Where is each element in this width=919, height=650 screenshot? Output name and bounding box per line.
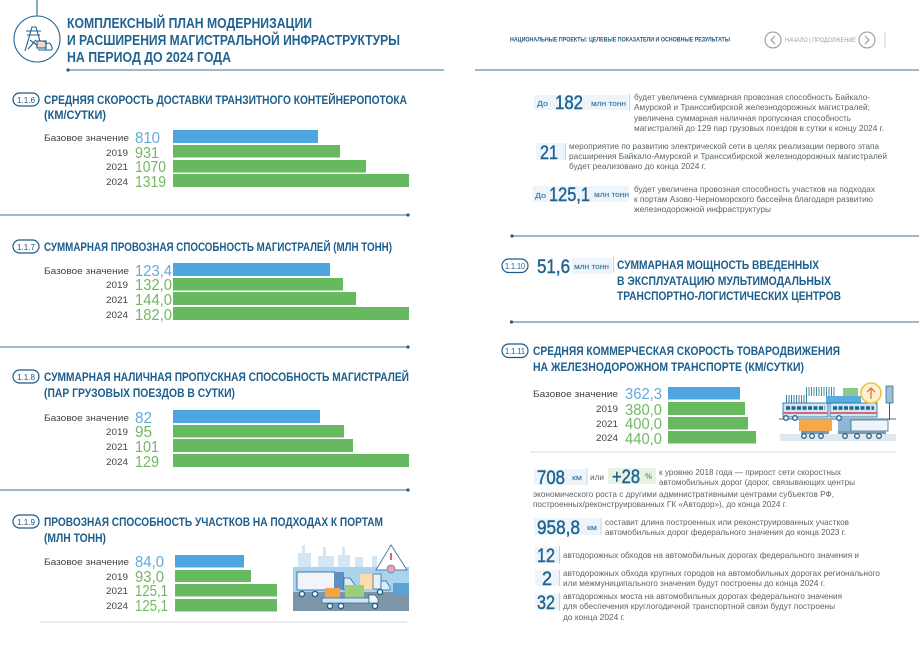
bar chart 1.1.6: 1319 (135, 174, 166, 191)
callout: 182 million tons: будет увеличена суммарная провозная способность Байкало- (634, 92, 870, 102)
bar chart 1.1.7: 2019 (106, 280, 128, 291)
badge 1.1.10 (502, 259, 528, 272)
title (67, 14, 400, 66)
callout: 182 million tons: До (537, 99, 548, 108)
heading 1.1.9 (44, 517, 383, 545)
callout: 708 km, +28 %: % (645, 472, 652, 481)
bar chart 1.1.9: 2024 (106, 601, 128, 612)
callout: 12 bypasses (535, 546, 859, 567)
bar chart 1.1.7: 123,4 (135, 263, 172, 280)
heading 1.1.10: ТРАНСПОРТНО-ЛОГИСТИЧЕСКИХ ЦЕНТРОВ (617, 291, 841, 303)
panel: 1.1.10 (502, 257, 841, 303)
bar chart 1.1.6: 2024 (106, 177, 128, 188)
heading 1.1.10: В ЭКСПЛУАТАЦИЮ МУЛЬТИМОДАЛЬНЫХ (617, 276, 831, 288)
callout: 182 million tons: 182 (555, 93, 583, 114)
heading 1.1.11: СРЕДНЯЯ КОММЕРЧЕСКАЯ СКОРОСТЬ ТОВАРОДВИЖЕНИЯ (533, 346, 840, 358)
callout: 32 bridges: автодорожных моста на автомобильных дорогах федерального значения (563, 591, 842, 601)
callout: 12 bypasses: автодорожных обходов на автомобильных дорогах федерального значения и (563, 550, 859, 560)
illustration: trains with speed-up sign and signal (779, 383, 896, 441)
panel: 1.1.7 (13, 240, 409, 324)
bar chart 1.1.9: 84,0 (135, 554, 164, 571)
badge 1.1.6 (13, 93, 39, 106)
badge 1.1.7 (13, 240, 39, 253)
bar chart 1.1.9: 125,1 (135, 583, 168, 600)
bar chart 1.1.9: Базовое значение (44, 557, 129, 568)
callout: 2 city bypasses (535, 568, 880, 590)
callout: 182 million tons: млн тонн (591, 99, 626, 108)
bar chart 1.1.8: 2024 (106, 457, 128, 468)
bar chart 1.1.11: 2024 (596, 433, 618, 444)
callout: 708 km, +28 %: автомобильных дорог (дорог, связывающих центры (659, 477, 855, 487)
bar chart 1.1.9: 93,0 (135, 569, 164, 586)
bar chart 1.1.6: 1070 (135, 159, 166, 176)
title rule (66, 68, 444, 72)
callout: 125.1 million tons: До (535, 191, 546, 200)
bar chart 1.1.9 (44, 554, 277, 615)
callout: 21 events: расширения Байкало-Амурской и Транссибирской железнодорожных магистралей (569, 151, 887, 161)
title: КОМПЛЕКСНЫЙ ПЛАН МОДЕРНИЗАЦИИ (67, 14, 312, 32)
callout: 125.1 million tons: 125,1 (549, 185, 590, 206)
bar chart 1.1.8: 82 (135, 410, 152, 427)
bar chart 1.1.11: 362,3 (625, 386, 662, 403)
callout: 958.8 km: составит длина построенных или реконструированных участков (605, 517, 849, 527)
badge 1.1.8: 1.1.8 (17, 372, 35, 382)
callout: 21 events (536, 141, 887, 171)
running header: НАЦИОНАЛЬНЫЕ ПРОЕКТЫ: ЦЕЛЕВЫЕ ПОКАЗАТЕЛИ И ОСНОВНЫЕ РЕЗУЛЬТАТЫ (510, 36, 730, 44)
heading 1.1.10: СУММАРНАЯ МОЩНОСТЬ ВВЕДЕННЫХ (617, 260, 819, 272)
callout: 182 million tons: магистралей до 129 пар грузовых поездов в сутки к концу 2024 г. (634, 123, 884, 133)
callout: 708 km, +28 %: +28 (612, 467, 640, 488)
bar chart 1.1.6: 810 (135, 130, 160, 147)
callout: 2 city bypasses: автодорожных обхода крупных городов на автомобильных дорогах регионального (563, 568, 880, 578)
heading 1.1.10 (617, 260, 841, 303)
callout: 182 million tons: увеличена суммарная наличная пропускная способность (634, 113, 852, 123)
callout: 958.8 km (534, 517, 849, 539)
panel: 1.1.8 (13, 370, 409, 471)
callout: 32 bridges (535, 591, 842, 622)
badge 1.1.7: 1.1.7 (17, 242, 35, 252)
callout: 125.1 million tons: будет увеличена провозная способность участков на подходах (634, 184, 876, 194)
bar chart 1.1.7: 2024 (106, 310, 128, 321)
heading 1.1.8 (44, 371, 409, 400)
callout: 125.1 million tons: млн тонн (594, 190, 629, 199)
bar chart 1.1.9: 2021 (106, 586, 128, 597)
heading 1.1.7: СУММАРНАЯ ПРОВОЗНАЯ СПОСОБНОСТЬ МАГИСТРАЛЕЙ (МЛН ТОНН) (44, 241, 392, 254)
figure 51.6 (537, 257, 614, 278)
bar chart 1.1.7 (44, 263, 409, 324)
badge 1.1.8 (13, 370, 39, 383)
navigation: start / continue (765, 32, 885, 48)
callout: 708 km, +28 %: экономического роста с другими административными центрами субъектов РФ, (533, 489, 834, 499)
heading 1.1.11 (533, 346, 840, 374)
panel: 1.1.9 (13, 515, 409, 615)
bar chart 1.1.11: 380,0 (625, 402, 662, 419)
callout: 708 km, +28 %: построенных/реконструированных ГК «Автодор»), до конца 2024 г. (533, 499, 787, 509)
bar chart 1.1.7: 144,0 (135, 292, 172, 309)
badge 1.1.9: 1.1.9 (17, 517, 35, 527)
callout: 2 city bypasses: или межмуниципального значения будут построены до конца 2024 г. (563, 578, 825, 588)
bar chart 1.1.9: 125,1 (135, 598, 168, 615)
callout: 125.1 million tons (533, 184, 876, 214)
bar chart 1.1.6 (44, 130, 409, 191)
heading 1.1.11: НА ЖЕЛЕЗНОДОРОЖНОМ ТРАНСПОРТЕ (КМ/СУТКИ) (533, 362, 804, 374)
panel: 1.1.6 (13, 93, 409, 191)
heading 1.1.6 (44, 94, 407, 122)
bar chart 1.1.6: 2021 (106, 162, 128, 173)
bar chart 1.1.8: 2019 (106, 427, 128, 438)
icon: power pylon and truck emblem (14, 0, 60, 62)
figure 51.6: 51,6 (537, 257, 570, 278)
bar chart 1.1.7: 2021 (106, 295, 128, 306)
heading 1.1.6: СРЕДНЯЯ СКОРОСТЬ ДОСТАВКИ ТРАНЗИТНОГО КОНТЕЙНЕРОПОТОКА (44, 94, 407, 107)
callout: 32 bridges: 32 (537, 593, 555, 614)
heading 1.1.6: (КМ/СУТКИ) (44, 110, 106, 122)
bar chart 1.1.6: Базовое значение (44, 133, 129, 144)
callout: 708 km, +28 %: 708 (537, 468, 565, 489)
callout: 2 city bypasses: 2 (542, 569, 552, 590)
figure 51.6: млн тонн (574, 262, 609, 271)
bar chart 1.1.8: Базовое значение (44, 413, 129, 424)
bar chart 1.1.11: 2021 (596, 419, 618, 430)
callout: 32 bridges: до конца 2024 г. (563, 612, 625, 622)
heading 1.1.8: (ПАР ГРУЗОВЫХ ПОЕЗДОВ В СУТКИ) (44, 388, 235, 400)
bar chart 1.1.11: 440,0 (625, 431, 662, 448)
heading 1.1.9: ПРОВОЗНАЯ СПОСОБНОСТЬ УЧАСТКОВ НА ПОДХОДАХ К ПОРТАМ (44, 517, 383, 529)
heading 1.1.8: СУММАРНАЯ НАЛИЧНАЯ ПРОПУСКНАЯ СПОСОБНОСТЬ МАГИСТРАЛЕЙ (44, 371, 409, 384)
badge 1.1.11: 1.1.11 (505, 346, 525, 356)
bar chart 1.1.7: 132,0 (135, 277, 172, 294)
illustration: trucks on road with warning sign (293, 545, 409, 611)
navigation: start / continue: НАЧАЛО | ПРОДОЛЖЕНИЕ (785, 37, 857, 44)
callout: 182 million tons: Амурской и Транссибирской железнодорожных магистралей; (634, 102, 870, 112)
callout: 958.8 km: 958,8 (537, 518, 580, 539)
callout: 32 bridges: для обеспечения круглогодичной транспортной связи будут построены (563, 601, 835, 611)
heading 1.1.9: (МЛН ТОНН) (44, 533, 106, 545)
badge 1.1.10: 1.1.10 (505, 261, 525, 271)
bar chart 1.1.8: 129 (135, 454, 159, 471)
title: И РАСШИРЕНИЯ МАГИСТРАЛЬНОЙ ИНФРАСТРУКТУРЫ (67, 31, 400, 49)
callout: 708 km, +28 %: км (572, 473, 582, 482)
badge 1.1.9 (13, 515, 39, 528)
callout: 958.8 km: км (587, 523, 597, 532)
bar chart 1.1.11 (533, 386, 756, 448)
callout: 708 km, +28 %: к уровню 2018 года — прирост сети скоростных (659, 467, 842, 477)
bar chart 1.1.6: 2019 (106, 148, 128, 159)
bar chart 1.1.8: 95 (135, 424, 152, 441)
callout: 708 km, +28 %: или (590, 472, 604, 482)
badge 1.1.6: 1.1.6 (17, 95, 35, 105)
callout: 12 bypasses: 12 (537, 546, 555, 567)
bar chart 1.1.9: 2019 (106, 572, 128, 583)
badge 1.1.11 (502, 344, 528, 358)
title: НА ПЕРИОД ДО 2024 ГОДА (67, 50, 231, 66)
bar chart 1.1.7: 182,0 (135, 307, 172, 324)
callout: 21 events: мероприятие по развитию электрической сети в целях реализации первого этапа (569, 141, 879, 151)
bar chart 1.1.11: Базовое значение (533, 389, 618, 400)
callout: 958.8 km: автомобильных дорог федерального значения до конца 2023 г. (605, 527, 846, 537)
bar chart 1.1.7: Базовое значение (44, 266, 129, 277)
callout: 21 events: будет реализовано до конца 2024 г. (569, 161, 706, 171)
bar chart 1.1.8: 101 (135, 439, 159, 456)
bar chart 1.1.8 (44, 410, 409, 471)
bar chart 1.1.6: 931 (135, 145, 159, 162)
bar chart 1.1.11: 2019 (596, 404, 618, 415)
callout: 21 events: 21 (540, 143, 558, 164)
bar chart 1.1.8: 2021 (106, 442, 128, 453)
callout: 125.1 million tons: железнодорожной инфраструктуры (634, 204, 771, 214)
callout: 182 million tons (534, 92, 884, 133)
panel: 1.1.11 (502, 344, 896, 448)
bar chart 1.1.11: 400,0 (625, 416, 662, 433)
callout: 125.1 million tons: к портам Азово-Черноморского бассейна благодаря развитию (634, 194, 874, 204)
callout: 708 km, +28 % (533, 467, 855, 509)
